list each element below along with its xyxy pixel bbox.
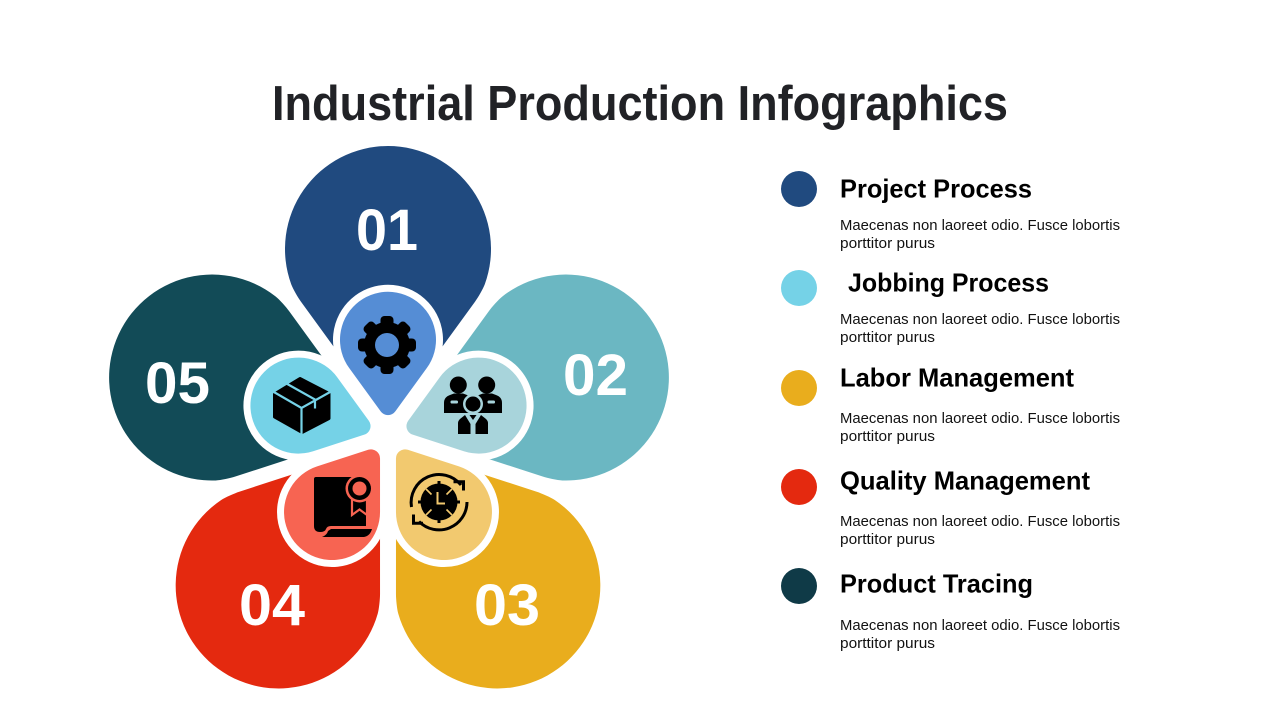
inner petal 05 [238,345,385,475]
legend text 5: porttitor purus [840,635,935,652]
legend dot 5 [781,568,817,604]
title: Industrial Production Infographics [272,77,1008,131]
legend heading 2: Jobbing Process [848,268,1049,298]
legend text 4: Maecenas non laoreet odio. Fusce lobortis [840,513,1120,530]
petal 02: Jobbing Process [370,248,696,529]
icon: package box [273,378,331,435]
icon: clock with cycle arrows [411,474,467,530]
number 02: 02 [563,343,628,408]
petal 01: Project Process [285,146,491,421]
legend dot 3 [781,370,817,406]
icon: gear [358,316,416,374]
legend text 5: Maecenas non laoreet odio. Fusce lobortis [840,617,1120,634]
number 03: 03 [474,573,540,638]
outer petal 01 [285,146,491,421]
icon: team of people [444,376,502,436]
icon: certificate scroll [314,474,374,537]
legend heading 4: Quality Management [840,466,1090,496]
legend text 1: Maecenas non laoreet odio. Fusce lobortis [840,217,1120,234]
inner petal 01 [340,292,436,415]
number 05: 05 [145,351,210,416]
legend dot 2 [781,270,817,306]
legend text 2: Maecenas non laoreet odio. Fusce lobortis [840,311,1120,328]
inner petal 04 [265,423,415,579]
legend dot 4 [781,469,817,505]
legend item: Jobbing Process [781,268,1120,346]
legend item: Quality Management [781,466,1120,548]
petal 03: Labor Management [313,385,641,720]
outer petal 04 [135,385,463,720]
legend text 2: porttitor purus [840,329,935,346]
outer petal 02 [370,248,696,529]
legend text 1: porttitor purus [840,235,935,252]
petal 05: Product Tracing [82,248,408,529]
number 04: 04 [239,573,305,638]
number 01: 01 [356,198,418,263]
outer petal 03 [313,385,641,720]
legend item: Product Tracing [781,568,1120,652]
legend [781,171,1120,652]
petal 04: Quality Management [135,385,463,720]
legend heading 3: Labor Management [840,362,1074,392]
legend item: Labor Management [781,362,1120,445]
inner petal 02 [392,345,539,475]
outer petal 05 [82,248,408,529]
legend dot 1 [781,171,817,207]
legend item: Project Process [781,171,1120,252]
legend heading 5: Product Tracing [840,568,1033,598]
legend heading 1: Project Process [840,174,1032,204]
inner petal 03 [361,423,511,579]
legend text 3: Maecenas non laoreet odio. Fusce lobortis [840,410,1120,427]
legend text 3: porttitor purus [840,428,935,445]
legend text 4: porttitor purus [840,531,935,548]
